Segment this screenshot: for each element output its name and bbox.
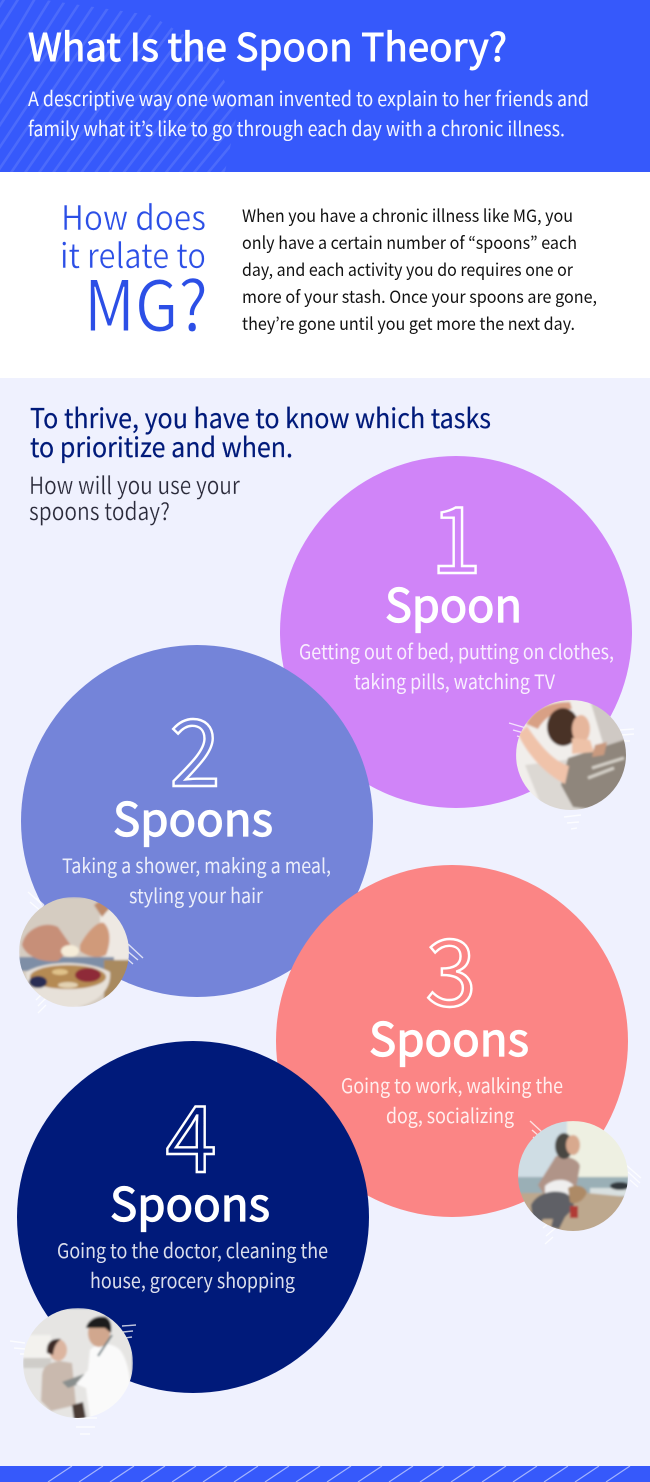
circle: 4 spoons: Going to the doctor, cleaning the	[57, 1235, 328, 1264]
circle: 4 spoons: house, grocery shopping	[90, 1265, 295, 1294]
circle: 1 spoon: taking pills, watching TV	[354, 666, 555, 695]
explanation paragraph: When you have a chronic illness like MG, you	[242, 202, 573, 227]
explanation paragraph: day, and each activity you do requires one or	[242, 256, 573, 281]
circle: 2 spoons: Taking a shower, making a meal,	[62, 850, 331, 879]
circle: 3 spoons: 3	[425, 900, 477, 1033]
question: how will you use your spoons: spoons today?	[29, 492, 170, 527]
title: What Is the Spoon Theory?	[28, 17, 507, 73]
photo: hands over a fruit bowl	[19, 892, 143, 1013]
circle: 3 spoons: Going to work, walking the	[341, 1070, 563, 1099]
header description	[28, 83, 589, 142]
heading: how does it relate to MG	[60, 191, 208, 352]
heading: how does it relate to MG: How does	[61, 191, 206, 240]
heading: how does it relate to MG: MG?	[84, 251, 208, 352]
header description: A descriptive way one woman invented to explain to her friends and	[28, 83, 589, 112]
circle: 3 spoons	[276, 865, 628, 1217]
circle: 3 spoons: dog, socializing	[386, 1100, 514, 1129]
circle: 2 spoons	[21, 645, 373, 997]
header description: family what it’s like to go through each day with a chronic illness.	[28, 113, 565, 142]
question: how will you use your spoons	[29, 466, 241, 527]
circle: 1 spoon: 1	[430, 467, 482, 600]
explanation paragraph: they’re gone until you get more the next day.	[242, 310, 575, 335]
page background	[0, 378, 650, 1466]
circle: 3 spoons: Spoons	[369, 1004, 529, 1070]
circle: 4 spoons: 4	[165, 1066, 217, 1199]
header panel	[0, 0, 650, 180]
heading: thrive: To thrive, you have to know which tasks	[30, 397, 491, 436]
explanation paragraph: only have a certain number of “spoons” each	[242, 229, 577, 254]
explanation paragraph	[242, 202, 597, 335]
footer band	[0, 1466, 650, 1482]
heading: how does it relate to MG: it relate to	[60, 229, 206, 278]
circle: 2 spoons: Spoons	[113, 784, 273, 850]
circle: 1 spoon	[280, 456, 632, 808]
circle: 4 spoons: Spoons	[110, 1169, 270, 1235]
photo: doctor with patient	[10, 1308, 136, 1434]
photo: woman with dog on a beach	[517, 1120, 641, 1244]
explanation paragraph: more of your stash. Once your spoons are gone,	[242, 283, 597, 308]
circle: 2 spoons: 2	[169, 680, 221, 813]
photo: woman resting in bed	[509, 699, 634, 829]
circle: 1 spoon: Spoon	[385, 570, 522, 636]
circle: 2 spoons: styling your hair	[129, 880, 263, 909]
panel: how does it relate to MG	[0, 172, 650, 378]
heading: thrive	[30, 397, 491, 465]
circle: 1 spoon: Getting out of bed, putting on clothes,	[299, 636, 614, 665]
circle: 4 spoons	[17, 1041, 369, 1393]
question: how will you use your spoons: How will you use your	[29, 466, 241, 501]
heading: thrive: to prioritize and when.	[30, 426, 293, 465]
